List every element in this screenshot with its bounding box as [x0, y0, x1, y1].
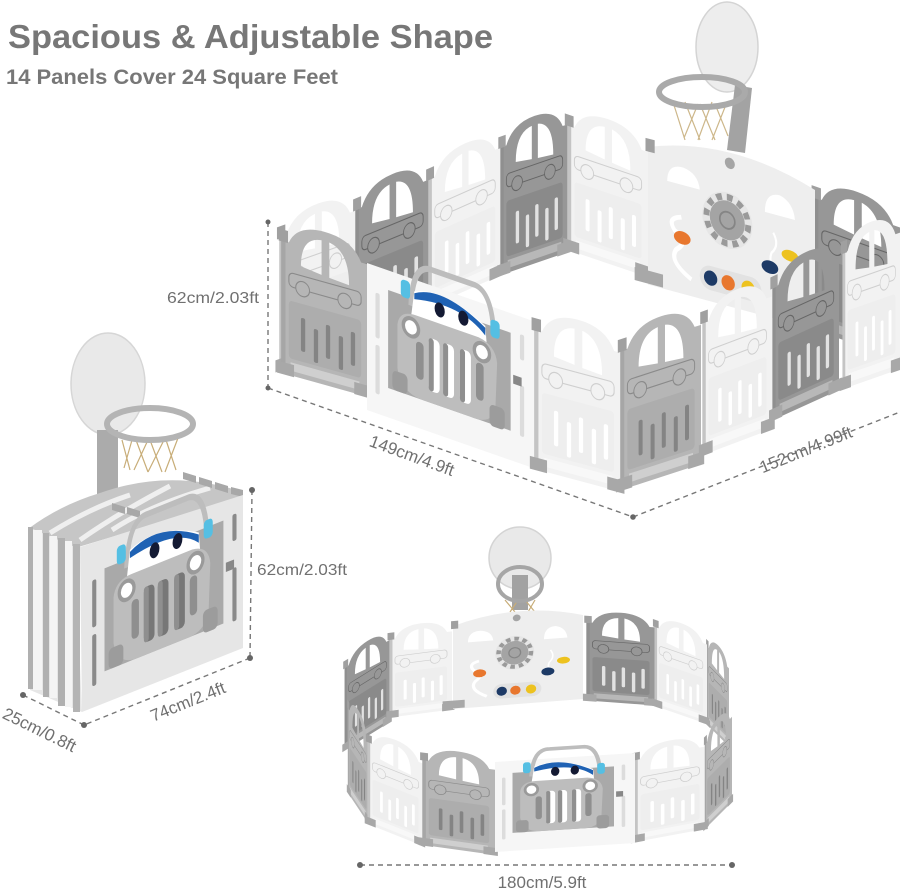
dimension: folded width: 74cm/2.4ft — [148, 678, 229, 726]
folded playpen with basketball hoop — [28, 333, 248, 712]
dimension: 149cm side: 149cm/4.9ft — [367, 432, 457, 480]
dimension: 152cm side — [630, 412, 900, 520]
front wall panels — [277, 211, 900, 494]
folded top edges — [28, 472, 243, 548]
round playpen with basketball hoop — [342, 527, 733, 856]
square playpen with basketball hoop — [275, 2, 900, 494]
dimension: 152cm side: 152cm/4.99ft — [757, 423, 855, 477]
icon: round pen backboard and hoop — [489, 527, 551, 612]
subtitle: 14 Panels Cover 24 Square Feet — [6, 66, 338, 89]
dimension: round diameter — [357, 862, 735, 891]
dimension: height of square pen: 62cm/2.03ft — [167, 290, 260, 307]
dimension: folded height: 62cm/2.03ft — [257, 562, 348, 579]
folded side stack — [28, 527, 82, 712]
floor — [520, 262, 800, 410]
back wall panels — [275, 103, 900, 373]
dimension: height of square pen — [167, 220, 270, 388]
dimension: 149cm side — [266, 386, 633, 517]
back ring panels — [342, 606, 730, 752]
folded door frame — [80, 495, 243, 712]
dimension: folded height — [249, 487, 348, 658]
front ring panels — [347, 693, 733, 856]
dimension: folded width — [84, 655, 253, 726]
icon: large backboard and hoop — [659, 2, 758, 153]
dimension: folded depth: 25cm/0.8ft — [0, 704, 79, 756]
icon: folded backboard and hoop — [71, 333, 193, 494]
title: Spacious & Adjustable Shape — [8, 18, 493, 55]
folded front door panel — [84, 473, 248, 710]
